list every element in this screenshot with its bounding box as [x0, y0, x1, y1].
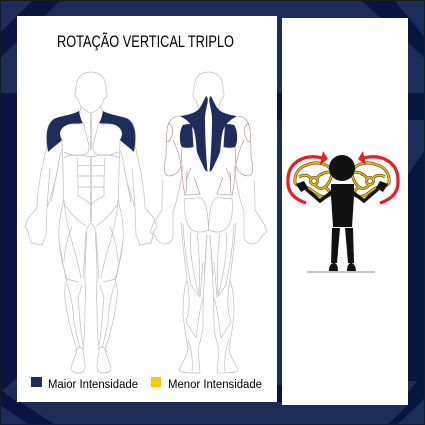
- front body figure: [25, 72, 157, 373]
- legend swatch: higher intensity: [31, 377, 42, 387]
- legend swatch: lower intensity: [151, 377, 161, 387]
- title: ROTAÇÃO VERTICAL TRIPLO: [57, 31, 234, 51]
- legend label: lower intensity: Menor Intensidade: [168, 379, 262, 391]
- figure: [296, 155, 388, 271]
- rotation arrows: [288, 151, 398, 203]
- ground line: [307, 271, 375, 273]
- icon: person with arm rotation: [288, 151, 398, 272]
- panel: exercise diagram: [282, 18, 408, 405]
- back body figure: [150, 72, 267, 373]
- front deltoids highlighted: [47, 111, 135, 152]
- machine handles: [295, 163, 389, 197]
- back muscles highlighted: [180, 96, 237, 172]
- legend label: higher intensity: Maior Intensidade: [48, 379, 138, 391]
- panel: muscle chart: [17, 16, 277, 402]
- legend: [31, 377, 262, 391]
